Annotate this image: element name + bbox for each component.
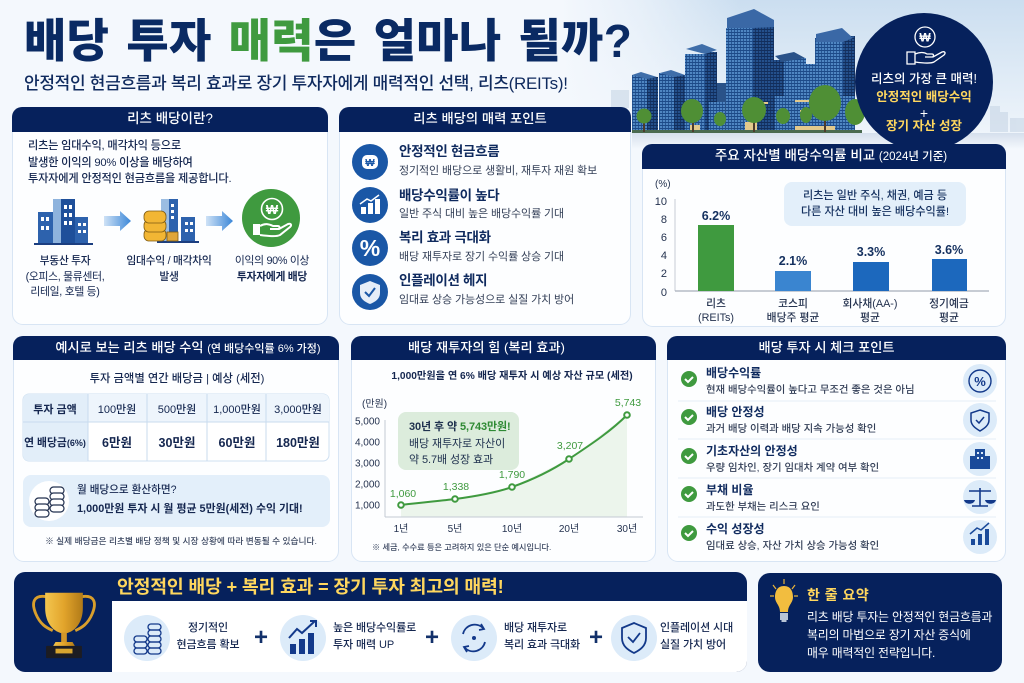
- icon: percent: %: [360, 235, 380, 261]
- icon: hand with won coin: [906, 26, 946, 65]
- footnote: ※ 세금, 수수료 등은 고려하지 있은 단순 예시입니다.: [372, 543, 551, 552]
- line chart: 1년: [393, 522, 408, 534]
- heading: [667, 336, 1006, 360]
- banner content white area: [112, 601, 747, 672]
- bar chart: 2.1%: [779, 254, 807, 268]
- label: real estate: [26, 254, 104, 298]
- text block: 발생한 이익의 90% 이상을 배당하여: [28, 156, 193, 168]
- footnote: ※ 실제 배당금은 리츠별 배당 정책 및 시장 상황에 따라 변동될 수 있습니다.: [45, 536, 317, 546]
- point 4 text: 임대료 상승 가능성으로 실질 가치 방어: [399, 294, 574, 306]
- line chart: 2,000: [354, 479, 380, 490]
- table title: 투자 금액별 연간 배당금 | 예상 (세전): [90, 373, 264, 385]
- bar chart: 3.3%: [857, 245, 885, 259]
- chart title: 1,000만원을 연 6% 배당 재투자 시 예상 자산 규모 (세전): [391, 371, 633, 382]
- point 4 title: 인플레이션 헤지: [399, 273, 487, 288]
- panel: yield comparison: [642, 144, 1006, 327]
- item 3 text: [504, 622, 580, 651]
- item 2 text: 높은 배당수익률로: [333, 622, 416, 634]
- dividend table: 3,000만원: [274, 402, 321, 416]
- icon: percent: [352, 230, 388, 266]
- line chart: 1,000: [354, 500, 380, 511]
- heading: 리츠 배당이란?: [127, 111, 213, 126]
- label: income: 임대수익 / 매각차익: [126, 255, 212, 267]
- panel: what is REIT dividend: [12, 107, 328, 325]
- icon: coins: [29, 481, 69, 521]
- item 1 text: 정기적인: [188, 622, 228, 634]
- line chart: 20년: [558, 522, 579, 534]
- dividend table: 60만원: [218, 436, 255, 450]
- bar chart: 리츠: [706, 297, 726, 310]
- label: real estate: (오피스, 물류센터,: [26, 271, 104, 283]
- item 3 text: 배당 재투자로: [504, 622, 567, 634]
- item 4 icon: shield: [611, 615, 657, 661]
- item 2 text: 투자 매력 UP: [333, 639, 394, 651]
- item 2: 배당 안정성: [706, 404, 765, 418]
- bar chart: 정기예금: [929, 297, 969, 310]
- panel: checklist: [667, 336, 1006, 562]
- line chart: 5,000: [354, 416, 380, 427]
- heading: [12, 107, 328, 132]
- line chart: 30년: [616, 522, 637, 534]
- point 2 title: 배당수익률이 높다: [399, 188, 499, 203]
- plus: +: [589, 624, 603, 651]
- heading: [13, 336, 339, 360]
- label: income: [126, 254, 212, 283]
- dividend table: [22, 394, 330, 462]
- line chart: 5년: [447, 522, 462, 534]
- icon: coins and building: [144, 199, 199, 243]
- bar chart: 8: [661, 214, 667, 226]
- text block: 리츠는 임대수익, 매각차익 등으로: [28, 140, 181, 152]
- item 1 icon: coins: [124, 615, 170, 661]
- dividend table: 6만원: [102, 436, 131, 450]
- item 3 icon: cycle: [451, 615, 497, 661]
- line chart: 3,207: [556, 440, 583, 452]
- icon: cash flow: [352, 144, 388, 180]
- callout circle: biggest charm: +: [920, 105, 928, 121]
- callout: 다른 자산 대비 높은 배당수익률!: [801, 206, 949, 218]
- dividend table: 연 배당금(6%): [24, 434, 85, 448]
- summary text: 매우 매력적인 전략입니다.: [807, 646, 935, 660]
- callout text: 리츠의 가장 큰 매력!: [871, 72, 977, 86]
- line chart: 4,000: [354, 437, 380, 448]
- panel: one line summary: [758, 573, 1002, 672]
- heading: 예시로 보는 리츠 배당 수익 (연 배당수익률 6% 가정): [55, 340, 321, 355]
- bar chart: 3.6%: [935, 243, 963, 257]
- banner: conclusion: [14, 572, 747, 672]
- callout: 리츠는 일반 주식, 채권, 예금 등: [803, 190, 947, 202]
- item 3: 기초자산의 안정성: [706, 444, 798, 458]
- callout circle: biggest charm: [855, 13, 993, 151]
- icon: trophy: [32, 592, 96, 658]
- summary text: [807, 610, 992, 660]
- green callout: 배당 재투자로 자산이: [409, 438, 505, 450]
- bar chart: 10: [655, 196, 667, 208]
- item 4: 과도한 부채는 리스크 요인: [706, 502, 820, 513]
- text block: [28, 139, 231, 185]
- text block: 투자자에게 안정적인 현금흐름을 제공합니다.: [28, 173, 231, 185]
- bar chart: 배당주 평균: [767, 311, 819, 324]
- item 3: [706, 444, 879, 474]
- plus: +: [425, 624, 439, 651]
- item 4: 부채 비율: [706, 483, 754, 497]
- line chart: 1,060: [389, 488, 416, 500]
- item 2: 과거 배당 이력과 배당 지속 가능성 확인: [706, 424, 876, 434]
- label: income: 발생: [159, 271, 179, 283]
- panel: charm points: [339, 107, 631, 325]
- heading: [339, 107, 631, 132]
- panel: compounding: [351, 336, 656, 562]
- green callout: 약 5.7배 성장 효과: [409, 454, 493, 466]
- item 5: 수익 성장성: [706, 522, 765, 536]
- bar chart: 회사채(AA-): [842, 297, 898, 310]
- point 1 text: 정기적인 배당으로 생활비, 재투자 재원 확보: [399, 165, 597, 177]
- item 2 text: [333, 622, 416, 651]
- item 3 text: 복리 효과 극대화: [504, 639, 580, 651]
- callout: [784, 182, 966, 226]
- line chart: 1,790: [498, 468, 525, 480]
- monthly callout: 1,000만원 투자 시 월 평균 5만원(세전) 수익 기대!: [77, 503, 303, 515]
- point 2 text: 일반 주식 대비 높은 배당수익률 기대: [399, 208, 564, 220]
- banner heading: 안정적인 배당 + 복리 효과 = 장기 투자 최고의 매력!: [117, 576, 504, 597]
- arrow: [206, 211, 233, 231]
- item 4 text: [660, 622, 733, 651]
- label: pay out: 투자자에게 배당: [237, 271, 307, 283]
- dividend table: 100만원: [97, 402, 136, 416]
- summary text: 리츠 배당 투자는 안정적인 현금흐름과: [807, 610, 992, 624]
- icon: shield: [352, 274, 388, 310]
- line chart: (만원): [362, 398, 387, 410]
- bar chart: (REITs): [698, 312, 734, 324]
- heading: [351, 336, 656, 360]
- item 2 icon: growth chart: [280, 615, 326, 661]
- dividend table: 1,000만원: [213, 402, 260, 416]
- green callout: 30년 후 약 5,743만원!: [409, 421, 511, 433]
- dividend table: 500만원: [157, 402, 196, 416]
- panel: dividend example: [13, 336, 339, 562]
- monthly callout: [23, 475, 330, 527]
- summary text: 복리의 마법으로 장기 자산 증식에: [807, 628, 971, 642]
- heading: 배당 투자 시 체크 포인트: [758, 340, 894, 355]
- item 1: [706, 366, 915, 396]
- item 1: 현재 배당수익률이 높다고 무조건 좋은 것은 아님: [706, 385, 915, 396]
- green callout: [398, 412, 519, 470]
- title: 배당 투자 매력은 얼마나 될까?: [24, 15, 632, 67]
- icon: hand with won coin: ₩: [919, 30, 931, 44]
- callout circle: biggest charm: 안정적인 배당수익: [876, 90, 972, 104]
- label: pay out: [235, 254, 310, 283]
- point 3 text: 배당 재투자로 장기 수익률 상승 기대: [399, 251, 564, 263]
- line chart: 10년: [501, 522, 522, 534]
- line chart: 1,338: [442, 480, 469, 492]
- label: pay out: 이익의 90% 이상: [235, 255, 309, 267]
- heading: 배당 재투자의 힘 (복리 효과): [408, 340, 565, 355]
- point 1 title: 안정적인 현금흐름: [399, 144, 499, 159]
- item 4 text: 실질 가치 방어: [660, 639, 726, 651]
- dividend table: 투자 금액: [33, 402, 76, 416]
- item 5: [706, 522, 879, 552]
- icon: light bulb: [770, 579, 798, 622]
- bar chart: 0: [661, 287, 667, 299]
- plus: +: [254, 624, 268, 651]
- bar chart: 평균: [860, 311, 880, 324]
- bar chart: 코스피: [778, 297, 808, 310]
- dividers and check icons: %: [974, 374, 986, 388]
- label: real estate: 리테일, 호텔 등): [30, 286, 100, 298]
- item 1: 배당수익률: [706, 366, 761, 380]
- callout text: 월 배당으로 환산하면?: [77, 484, 176, 496]
- icon: bar chart: [352, 187, 388, 223]
- item 4 text: 인플레이션 시대: [660, 622, 733, 634]
- line chart: 5,743: [614, 396, 641, 408]
- bar chart: 6: [661, 232, 667, 244]
- callout circle: biggest charm: 장기 자산 성장: [886, 119, 962, 133]
- item 2: [706, 404, 876, 434]
- line chart: [354, 396, 643, 534]
- icon: cash flow: ₩: [365, 158, 375, 169]
- heading: 주요 자산별 배당수익률 비교 (2024년 기준): [715, 148, 947, 163]
- dividend table: 30만원: [158, 436, 195, 450]
- icon: building: [34, 199, 93, 245]
- label: real estate: 부동산 투자: [40, 255, 90, 267]
- item 5: 임대료 상승, 자산 가치 상승 가능성 확인: [706, 541, 879, 552]
- dividend table: 180만원: [276, 436, 319, 450]
- heading: [642, 144, 1006, 169]
- item 1 text: [176, 622, 240, 651]
- bar chart: (%): [655, 179, 671, 190]
- point 3 title: 복리 효과 극대화: [399, 230, 491, 245]
- item 4: [706, 483, 820, 513]
- bar chart: 6.2%: [702, 209, 730, 223]
- icon: green hand with won: [242, 189, 300, 247]
- arrow: [104, 211, 131, 231]
- item 3: 우량 임차인, 장기 임대차 계약 여부 확인: [706, 462, 879, 474]
- bar chart: 평균: [939, 311, 959, 324]
- bar chart: 2: [661, 268, 667, 280]
- icon: green hand with won: ₩: [266, 202, 279, 217]
- bar chart: 4: [661, 250, 667, 262]
- summary heading: 한 줄 요약: [807, 587, 869, 603]
- heading: 리츠 배당의 매력 포인트: [413, 111, 547, 126]
- item 1 text: 현금흐름 확보: [176, 639, 240, 651]
- bar chart: [655, 179, 989, 324]
- line chart: 3,000: [354, 458, 380, 469]
- subtitle: 안정적인 현금흐름과 복리 효과로 장기 투자자에게 매력적인 선택, 리츠(REITs)!: [24, 74, 568, 93]
